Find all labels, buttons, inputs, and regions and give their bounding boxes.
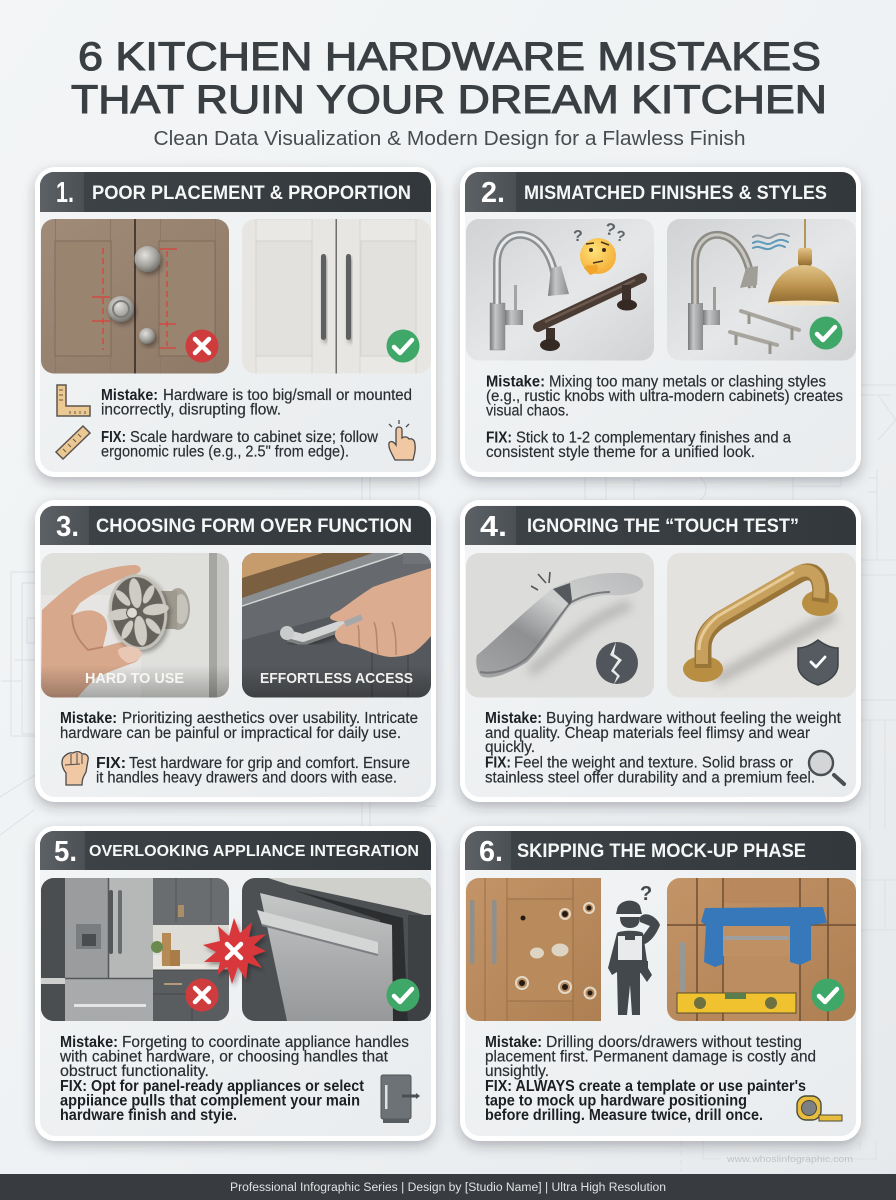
header 4: IGNORING THE “TOUCH TEST” [527, 516, 799, 537]
text: fix 5 [60, 1078, 364, 1124]
text: mistake 3: hardware can be painful or impractical for daily use. [60, 725, 401, 742]
icon: fist [62, 752, 88, 785]
panel: 4 ignoring the touch test [460, 500, 861, 802]
header 5: 5. [54, 836, 77, 868]
icon: burst warning [203, 918, 266, 984]
photo: coordinated finishes [667, 219, 856, 361]
subtitle: Clean Data Visualization & Modern Design for a Flawless Finish [154, 128, 746, 150]
text: mistake 6 [485, 1034, 816, 1080]
text: fix 6: FIX: ALWAYS create a template or use painter's [485, 1078, 806, 1095]
header 4 [465, 506, 856, 545]
text: mistake 6: unsightly. [485, 1063, 549, 1080]
text: mistake 3: Prioritizing aesthetics over usability. Intricate [122, 710, 418, 727]
text: mistake 4: and quality. Cheap materials feel flimsy and wear [485, 725, 810, 742]
header 3: 3. [56, 511, 79, 543]
text: mistake 2 [486, 374, 843, 420]
text: mistake 1: Mistake: [101, 387, 158, 404]
icon: thinking face: ? [614, 227, 626, 246]
text: mistake 2: Mixing too many metals or clashing styles [549, 374, 826, 390]
badge: right [812, 978, 844, 1012]
icon: carpenter square [57, 385, 90, 416]
icon: thinking face: ? [604, 219, 617, 240]
text: fix 1: ergonomic rules (e.g., 2.5" from edge). [101, 444, 349, 460]
photo: fridge in kitchen [41, 878, 229, 1021]
text: mistake 6: placement first. Permanent damage is costly and [485, 1048, 816, 1066]
icon: thinking face [574, 223, 625, 275]
photo: tape mock-up and level [667, 878, 856, 1021]
text: mistake 2: (e.g., rustic knobs with ultra-modern cabinets) creates [486, 388, 843, 405]
text: mistake 4: quickly. [485, 739, 535, 756]
text: fix 4: Feel the weight and texture. Solid brass or [514, 754, 793, 772]
icon: fridge with pull [381, 1075, 420, 1123]
photo: dishwasher with handle [242, 878, 431, 1021]
text: mistake 4: Buying hardware without feeling the weight [546, 710, 842, 727]
photo: easy pull handle [242, 553, 431, 698]
header 6: SKIPPING THE MOCK-UP PHASE [517, 841, 806, 862]
badge: right [386, 978, 420, 1012]
photo: ornate knob in hand [41, 553, 229, 698]
text: mistake 1 [101, 387, 412, 418]
header 2: 2. [481, 177, 505, 209]
title: THAT RUIN YOUR DREAM KITCHEN [71, 78, 827, 122]
text: fix 2: consistent style theme for a unified look. [486, 444, 755, 461]
text: mistake 3 [60, 710, 418, 742]
icon: confused worker [608, 883, 660, 1015]
icon: thinking face: ? [573, 228, 583, 245]
text: mistake 5: Forgeting to coordinate appliance handles [122, 1034, 409, 1051]
text: fix 3: Test hardware for grip and comfort. Ensure [129, 755, 410, 772]
text: fix 1: Scale hardware to cabinet size; follow [130, 429, 379, 446]
panel: 6 skipping the mock-up phase [460, 826, 861, 1141]
text: mistake 1: Hardware is too big/small or mounted [163, 387, 412, 404]
header 2 [465, 172, 856, 212]
badge: right [386, 330, 420, 362]
photo: solid brass handle [667, 553, 856, 698]
footer bar [0, 1174, 896, 1200]
photo: door with drill holes [466, 878, 601, 1021]
panel: 5 overlooking appliance integration [35, 826, 436, 1141]
text: mistake 3: Mistake: [60, 710, 117, 727]
photo: clashing faucet and handle [466, 219, 654, 361]
text: fix 2: FIX: [486, 430, 512, 446]
text: mistake 5: obstruct functionality. [60, 1063, 209, 1080]
text: fix 5: FIX: Opt for panel-ready appliances or select [60, 1078, 364, 1095]
header 2: MISMATCHED FINISHES & STYLES [524, 183, 827, 204]
photo: cracked handle [466, 553, 654, 698]
text: fix 6: tape to mock up hardware positioning [485, 1092, 747, 1110]
icon: airflow waves [753, 234, 789, 249]
footer bar: Professional Infographic Series | Design by [Studio Name] | Ultra High Resolution [230, 1182, 666, 1194]
text: fix 4: FIX: [485, 754, 511, 772]
title: 6 KITCHEN HARDWARE MISTAKES [78, 35, 821, 79]
text: mistake 6: Drilling doors/drawers without testing [546, 1034, 802, 1051]
icon: crack [596, 642, 638, 684]
label: effortless access: EFFORTLESS ACCESS [260, 670, 413, 687]
text: mistake 4 [485, 710, 842, 756]
icon: ruler [56, 426, 90, 459]
header 3 [40, 506, 431, 545]
badge: right [810, 316, 842, 350]
photo: badly placed knobs [41, 219, 229, 374]
text: fix 1: FIX: [101, 429, 126, 446]
text: fix 5: appiiance pulls that complement your main [60, 1092, 360, 1110]
text: fix 5: hardware finish and styie. [60, 1107, 237, 1124]
icon: confused worker: ? [640, 883, 652, 905]
header 1: 1. [56, 177, 74, 209]
text: fix 1 [101, 429, 379, 460]
icon: shield [798, 640, 838, 685]
text: fix 6 [485, 1078, 806, 1124]
icon: pointing hand [389, 420, 415, 460]
text: fix 3: FIX: [96, 755, 126, 772]
icon: magnifier [809, 751, 844, 784]
text: mistake 1: incorrectly, disrupting flow. [101, 402, 281, 418]
text: mistake 6: Mistake: [485, 1034, 542, 1051]
header 5 [40, 831, 431, 870]
panel: 2 mismatched finishes and styles [460, 167, 861, 477]
text: mistake 2: visual chaos. [486, 402, 569, 420]
header 1 [40, 172, 431, 212]
panel: 3 choosing form over function [35, 500, 436, 802]
panel: 1 poor placement and proportion [35, 167, 436, 477]
text: fix 2 [486, 430, 791, 461]
title [71, 35, 827, 122]
text: mistake 5 [59, 1034, 409, 1080]
text: mistake 2: Mistake: [486, 374, 545, 390]
header 6 [465, 831, 856, 870]
header 1: POOR PLACEMENT & PROPORTION [92, 183, 411, 204]
header 5: OVERLOOKING APPLIANCE INTEGRATION [89, 843, 419, 860]
text: fix 3 [96, 755, 410, 786]
header 3: CHOOSING FORM OVER FUNCTION [96, 516, 412, 537]
icon: tape measure [797, 1096, 842, 1121]
photo: correct pulls [242, 219, 431, 374]
text: fix 6: before drilling. Measure twice, drill once. [485, 1107, 763, 1124]
text: fix 3: it handles heavy drawers and doors with ease. [96, 770, 397, 786]
text: mistake 4: Mistake: [485, 710, 542, 727]
text: fix 2: Stick to 1-2 complementary finishes and a [516, 430, 791, 446]
watermark: www.whoslinfographic.com [726, 1154, 853, 1165]
text: mistake 5: with cabinet hardware, or choosing handles that [59, 1048, 389, 1066]
badge: wrong [186, 330, 218, 362]
text: fix 4: stainless steel offer durability and a premium feel. [485, 770, 815, 786]
header 6: 6. [479, 836, 503, 868]
badge: wrong [186, 978, 218, 1012]
header 4: 4. [480, 511, 507, 543]
text: fix 4 [485, 754, 815, 786]
label: hard to use: HARD TO USE [85, 670, 184, 687]
text: mistake 5: Mistake: [60, 1034, 118, 1051]
